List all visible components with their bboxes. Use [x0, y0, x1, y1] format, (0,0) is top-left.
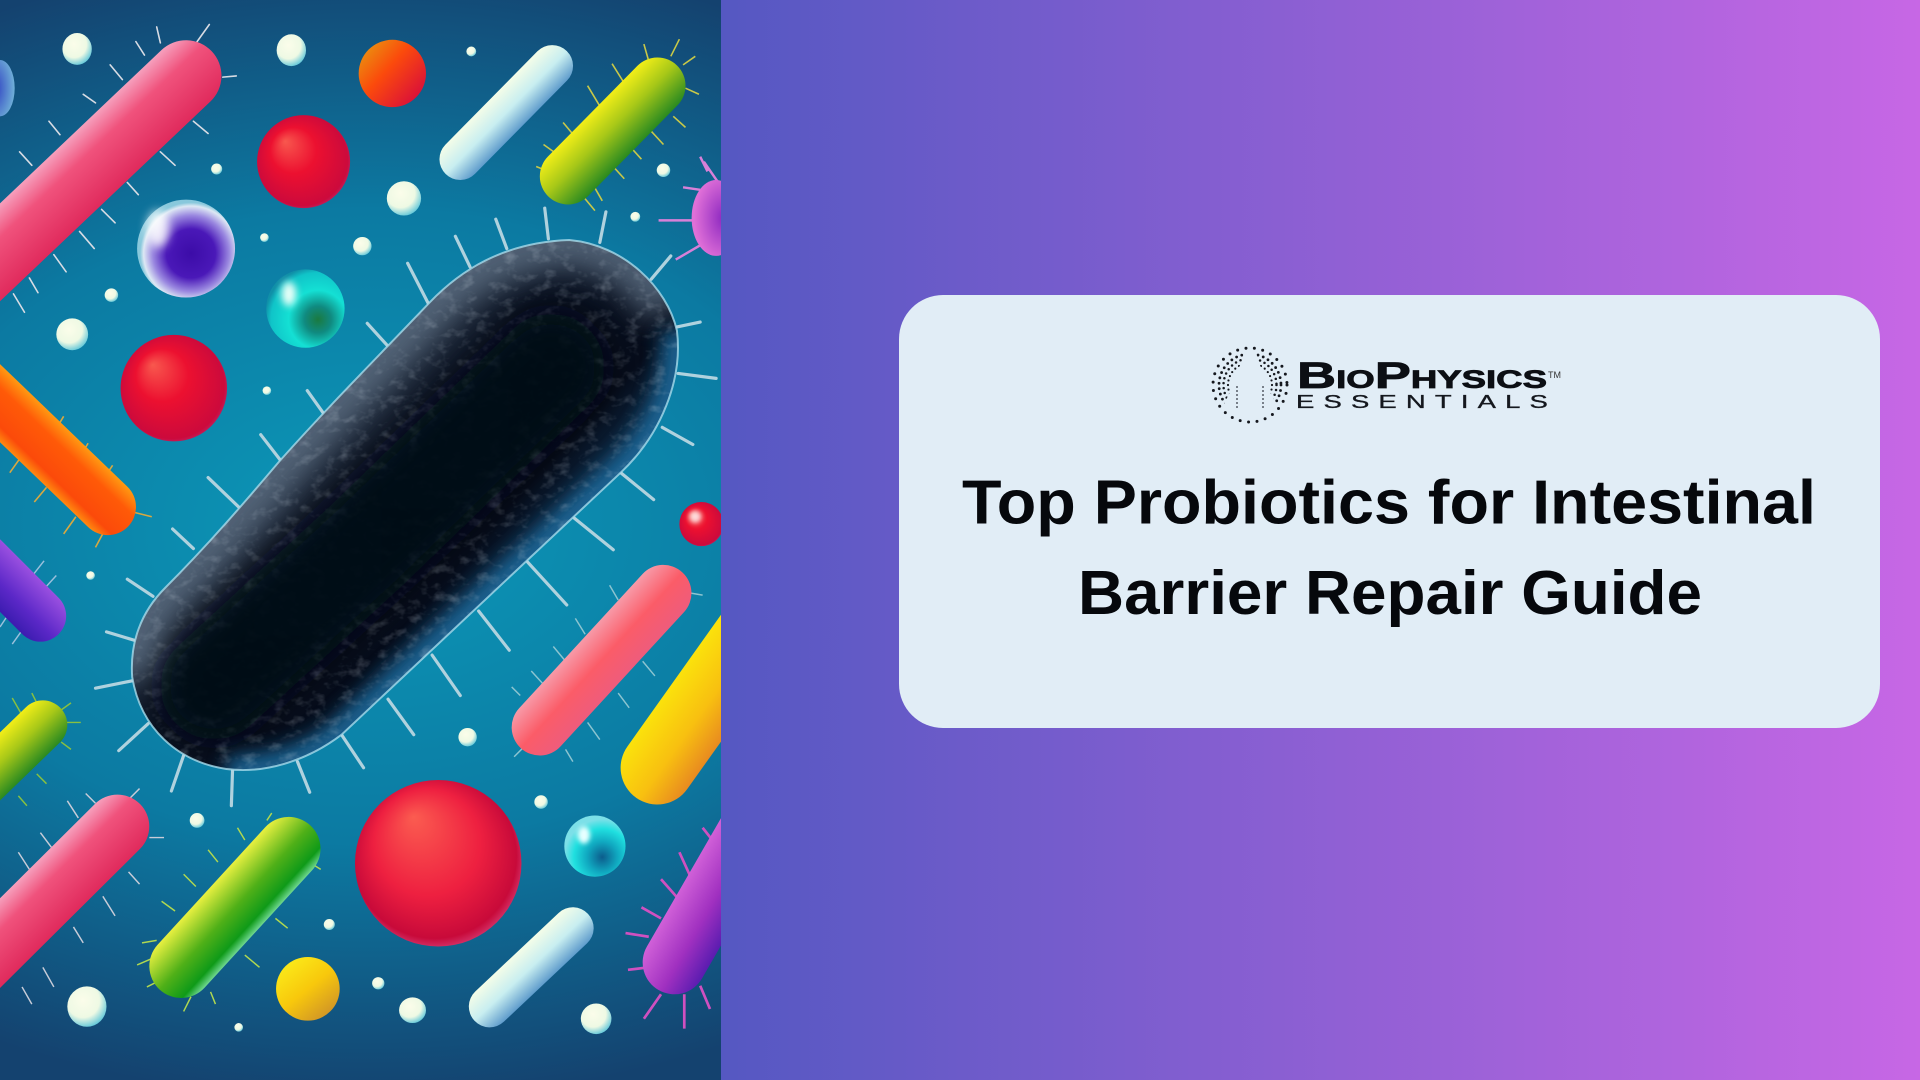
- illustration background: [0, 0, 721, 1080]
- cell: red right edge: [679, 502, 723, 546]
- cell: magenta top right: [659, 157, 741, 260]
- rod: large pink bacterium: [0, 24, 236, 326]
- large dark bacterium: [122, 233, 686, 778]
- logo: BioPhysics Essentials: [1213, 345, 1561, 430]
- logo wordmark top line: B IO P HYSICS: [1297, 355, 1547, 396]
- cell: yellow lower: [276, 957, 340, 1021]
- rod: pale blue lower: [460, 899, 602, 1036]
- logo mark: dotted circle with human figure: [1213, 345, 1287, 430]
- cell: red upper: [257, 115, 350, 208]
- cell: violet bubble: [137, 200, 235, 298]
- large dark bacterium spikes: [95, 208, 716, 806]
- rod: green left: [0, 690, 81, 837]
- white spore dots: [56, 33, 670, 1034]
- title line 1: Top Probiotics for Intestinal: [962, 468, 1816, 538]
- panel: bacteria illustration: [0, 0, 721, 1080]
- rod: salmon: [500, 553, 703, 767]
- cell: orange upper: [359, 40, 426, 107]
- rod: yellow green top: [528, 39, 699, 216]
- card content: logo and title: [962, 346, 1816, 628]
- cell: teal sphere: [266, 269, 345, 348]
- title line 2: Barrier Repair Guide: [1078, 559, 1702, 628]
- card background: [899, 295, 1880, 728]
- rod: orange left: [0, 340, 152, 547]
- rod: purple lower right: [626, 783, 796, 1029]
- logo wordmark bottom line: ESSENTIALS: [1296, 392, 1557, 412]
- rod: yellow right: [606, 573, 810, 819]
- rod: green lower: [136, 804, 334, 1011]
- cell: large red: [355, 780, 521, 947]
- rod: violet left: [0, 515, 77, 652]
- rod: pink lower left: [0, 781, 164, 1025]
- trademark: TM: [1548, 370, 1561, 380]
- cell: small cyan: [564, 816, 626, 877]
- cell: blue left edge: [0, 60, 15, 116]
- rod: pale blue top: [431, 36, 582, 189]
- title: [962, 468, 1816, 628]
- cell: red middle left: [121, 335, 227, 441]
